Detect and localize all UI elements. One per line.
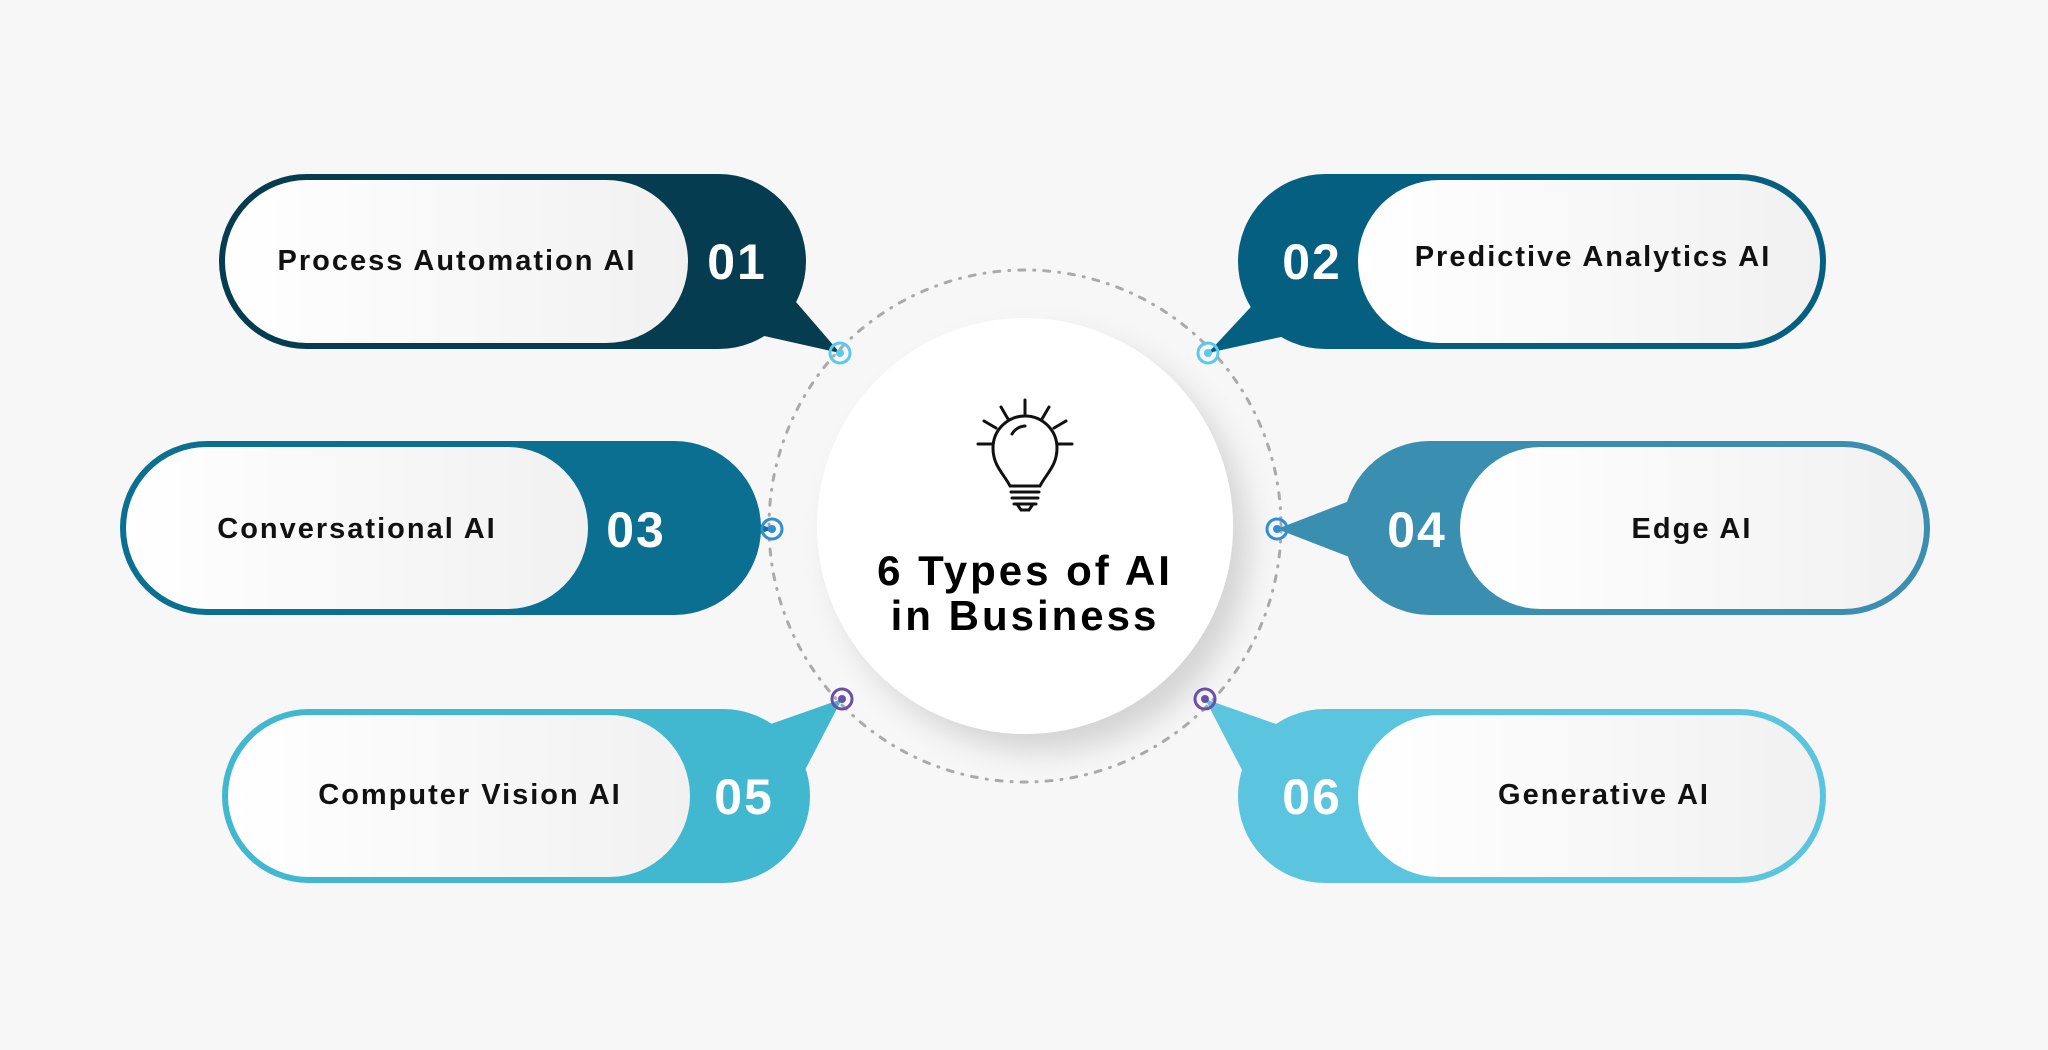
panel: 06: Generative AI [1498, 779, 1710, 811]
panel: 03: 03 [606, 502, 666, 558]
panel: 04: 04 [1387, 502, 1447, 558]
panel: 01 [219, 174, 850, 363]
panel: 04: Edge AI [1632, 513, 1752, 545]
panel: 02: 02 [1282, 234, 1342, 290]
panel: 01: Process Automation AI [278, 245, 636, 277]
panel: 06: 06 [1282, 769, 1342, 825]
panel: 03 [120, 441, 782, 615]
center circle: in Business [891, 592, 1159, 639]
panel: 03: Conversational AI [217, 513, 497, 545]
panel: 05: Computer Vision AI [318, 779, 622, 811]
dotted ring [769, 270, 1281, 782]
panel: 02: Predictive Analytics AI [1415, 241, 1771, 273]
panel: 05: 05 [714, 769, 774, 825]
center circle [817, 318, 1233, 734]
panel: 06 [1195, 689, 1826, 883]
panel: 05 [222, 689, 852, 883]
icon: light bulb [978, 400, 1072, 510]
panel: 02 [1198, 174, 1826, 363]
panel: 04 [1267, 441, 1930, 615]
panel: 01: 01 [707, 234, 767, 290]
title: 6 Types of AI [877, 547, 1173, 594]
